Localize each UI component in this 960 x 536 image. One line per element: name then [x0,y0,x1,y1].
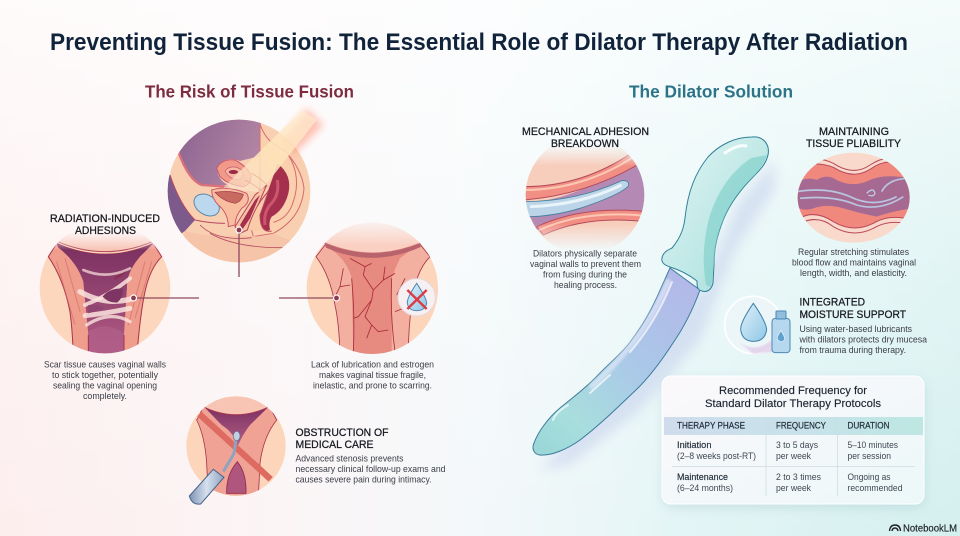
text: dryness description: inelastic, and prone to scarring. [313,380,432,390]
table header: THERAPY PHASE [677,421,745,431]
text: adhesions description: to stick together, potentially [52,370,158,380]
heading: the risk of tissue fusion: The Risk of Tissue Fusion [145,82,354,102]
row: initiation: Initiation [677,440,712,450]
text: pliability description: blood flow and maintains vaginal [792,258,916,268]
heading: maintaining tissue pliability: TISSUE PLIABILITY [806,138,901,150]
heading: obstruction of medical care: MEDICAL CARE [296,439,374,451]
text: adhesions description: Scar tissue causes vaginal walls [44,360,166,370]
icon: prohibited bar [199,414,271,479]
text: moisture description: from trauma during therapy. [800,345,906,355]
dilator shaft [533,268,700,455]
leader line: dryness [279,295,340,301]
leader line: top illustration [236,227,242,277]
text: mechanical description: vaginal walls to prevent them [530,259,641,269]
row: maintenance [677,472,902,493]
icon: medical instrument [189,431,240,504]
text: dryness description [311,360,434,390]
text: obstruction description: necessary clinical follow-up exams and [296,464,446,474]
text: moisture description: Using water-based lubricants [800,324,912,334]
text: adhesions description: completely. [83,391,127,401]
dilator handle [662,137,768,291]
row: initiation: per week [776,451,811,461]
text: moisture description [799,324,928,355]
text: dryness description: Lack of lubrication and estrogen [311,360,434,370]
heading: mechanical adhesion breakdown [522,126,649,150]
text: pliability description [792,247,916,278]
heading: the dilator solution: The Dilator Solution [629,82,793,102]
heading: integrated moisture support [800,297,906,321]
text: pliability description: length, width, and elasticity. [800,268,907,278]
illustration: dilator [533,137,768,455]
text: mechanical description [530,249,641,290]
title: Preventing Tissue Fusion: The Essential Role of Dilator Therapy After Radiation [50,29,908,56]
heading: maintaining tissue pliability [806,126,901,150]
heading: obstruction of medical care [296,427,389,451]
table header [664,417,923,435]
row: maintenance: per week [776,483,811,493]
text: adhesions description: sealing the vaginal opening [53,380,157,390]
text: moisture description: with dilators protects dry mucesa [799,334,928,344]
heading: radiation-induced adhesions [50,213,160,237]
leader line: adhesions [130,295,199,301]
row: maintenance: recommended [848,483,902,493]
row: initiation: 5–10 minutes [848,440,898,450]
row: maintenance: (6–24 months) [677,483,733,493]
table title: Standard Dilator Therapy Protocols [705,398,882,410]
illustration: dry cracked tissue [306,222,438,354]
heading: mechanical adhesion breakdown: MECHANICAL ADHESION [522,126,649,138]
heading: mechanical adhesion breakdown: BREAKDOWN [551,138,619,150]
text: obstruction description [296,454,446,484]
text: mechanical description: from fusing during the [543,270,627,280]
illustration: pelvic radiation cross-section [160,105,323,270]
illustration: radiation-induced adhesions [40,234,170,354]
text: pliability description: Regular stretching stimulates [798,247,909,257]
table title [705,385,882,410]
panel: recommended frequency table [662,376,924,507]
row: initiation: 3 to 5 days [776,440,818,450]
row: maintenance: 2 to 3 times [776,472,821,482]
row: initiation: per session [848,451,891,461]
icon: no moisture badge [398,279,435,316]
table header: DURATION [848,421,890,431]
text: adhesions description [44,360,166,401]
heading: maintaining tissue pliability: MAINTAINING [819,126,889,138]
heading: obstruction of medical care: OBSTRUCTION OF [296,427,389,439]
logo: NotebookLM: NotebookLM [903,524,957,535]
dilator shadow [540,160,775,470]
heading: radiation-induced adhesions: RADIATION-INDUCED [50,213,160,225]
heading: integrated moisture support: INTEGRATED [800,297,865,309]
illustration: mechanical breakdown [526,148,644,247]
text: obstruction description: causes severe pain during intimacy. [296,474,432,484]
text: dryness description: makes vaginal tissue fragile, [319,370,426,380]
text: obstruction description: Advanced stenosis prevents [296,454,404,464]
row: initiation [677,440,898,461]
illustration: tissue pliability [797,150,912,245]
text: mechanical description: healing process. [554,280,617,290]
text: mechanical description: Dilators physically separate [533,249,637,259]
table dividers [672,435,915,496]
heading: radiation-induced adhesions: ADHESIONS [75,225,136,237]
row: initiation: (2–8 weeks post-RT) [677,451,756,461]
row: maintenance: Maintenance [677,472,728,482]
icon: moisture droplet and lubricant bottle [725,296,790,354]
table title: Recommended Frequency for [719,385,867,397]
table header: FREQUENCY [776,421,826,431]
illustration: obstruction of medical care [186,396,286,505]
row: maintenance: Ongoing as [848,472,891,482]
heading: integrated moisture support: MOISTURE SUPPORT [800,309,906,321]
